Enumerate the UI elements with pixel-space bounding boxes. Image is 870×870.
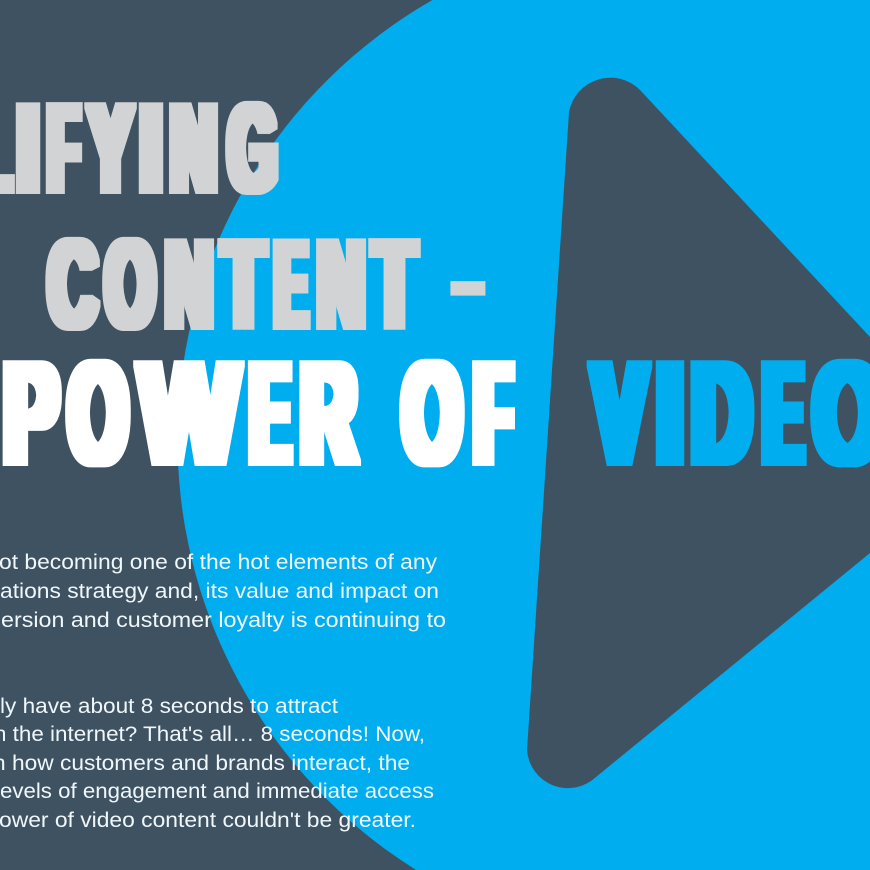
- title line: content: T: [222, 216, 264, 354]
- title line: video: D: [692, 332, 751, 494]
- text block: first paragraph: [0, 551, 446, 632]
- title line: power of: W: [140, 332, 238, 494]
- icon: play triangle: [527, 78, 870, 788]
- title line: power of: R: [301, 332, 356, 494]
- title line: amplifying: I: [139, 80, 163, 218]
- title line: power of: P: [4, 332, 58, 494]
- title line: power of: O: [403, 332, 461, 494]
- text block: second paragraph: n the internet? That's all… 8 seconds! Now,: [0, 723, 425, 746]
- title dash: -: [445, 210, 491, 346]
- title line: power of: O: [69, 332, 127, 494]
- title line: amplifying: Y: [89, 80, 132, 218]
- title line: power of: E: [251, 332, 289, 494]
- blue circle: [178, 0, 870, 870]
- title line: content: O: [106, 216, 154, 354]
- text block: second paragraph: [0, 695, 434, 832]
- title: F: [475, 332, 511, 494]
- text block: second paragraph: ly have about 8 seconds to attract: [0, 695, 338, 718]
- text block: first paragraph: ersion and customer loyalty is continuing to: [1, 609, 446, 632]
- text block: second paragraph: evels of engagement and immediate access: [0, 780, 434, 803]
- title: [0, 80, 870, 494]
- title line: video: I: [656, 332, 684, 494]
- title line: content: N: [318, 216, 364, 354]
- title line: video: E: [764, 332, 802, 494]
- text block: first paragraph: ations strategy and, its value and impact on: [0, 580, 439, 603]
- text block: second paragraph: n how customers and brands interact, the: [0, 752, 410, 775]
- title line: content: E: [276, 216, 306, 354]
- text block: second paragraph: ower of video content couldn't be greater.: [0, 809, 416, 832]
- title line: content: C: [49, 216, 96, 354]
- title line: amplifying: F: [48, 80, 78, 218]
- title line: amplifying: N: [171, 80, 216, 218]
- title line: video: V: [593, 332, 646, 494]
- title: G: [229, 80, 276, 218]
- title line: content: T: [374, 216, 416, 354]
- title line: amplifying: I: [16, 80, 40, 218]
- title line: content: N: [166, 216, 212, 354]
- text block: first paragraph: ot becoming one of the hot elements of any: [0, 551, 438, 574]
